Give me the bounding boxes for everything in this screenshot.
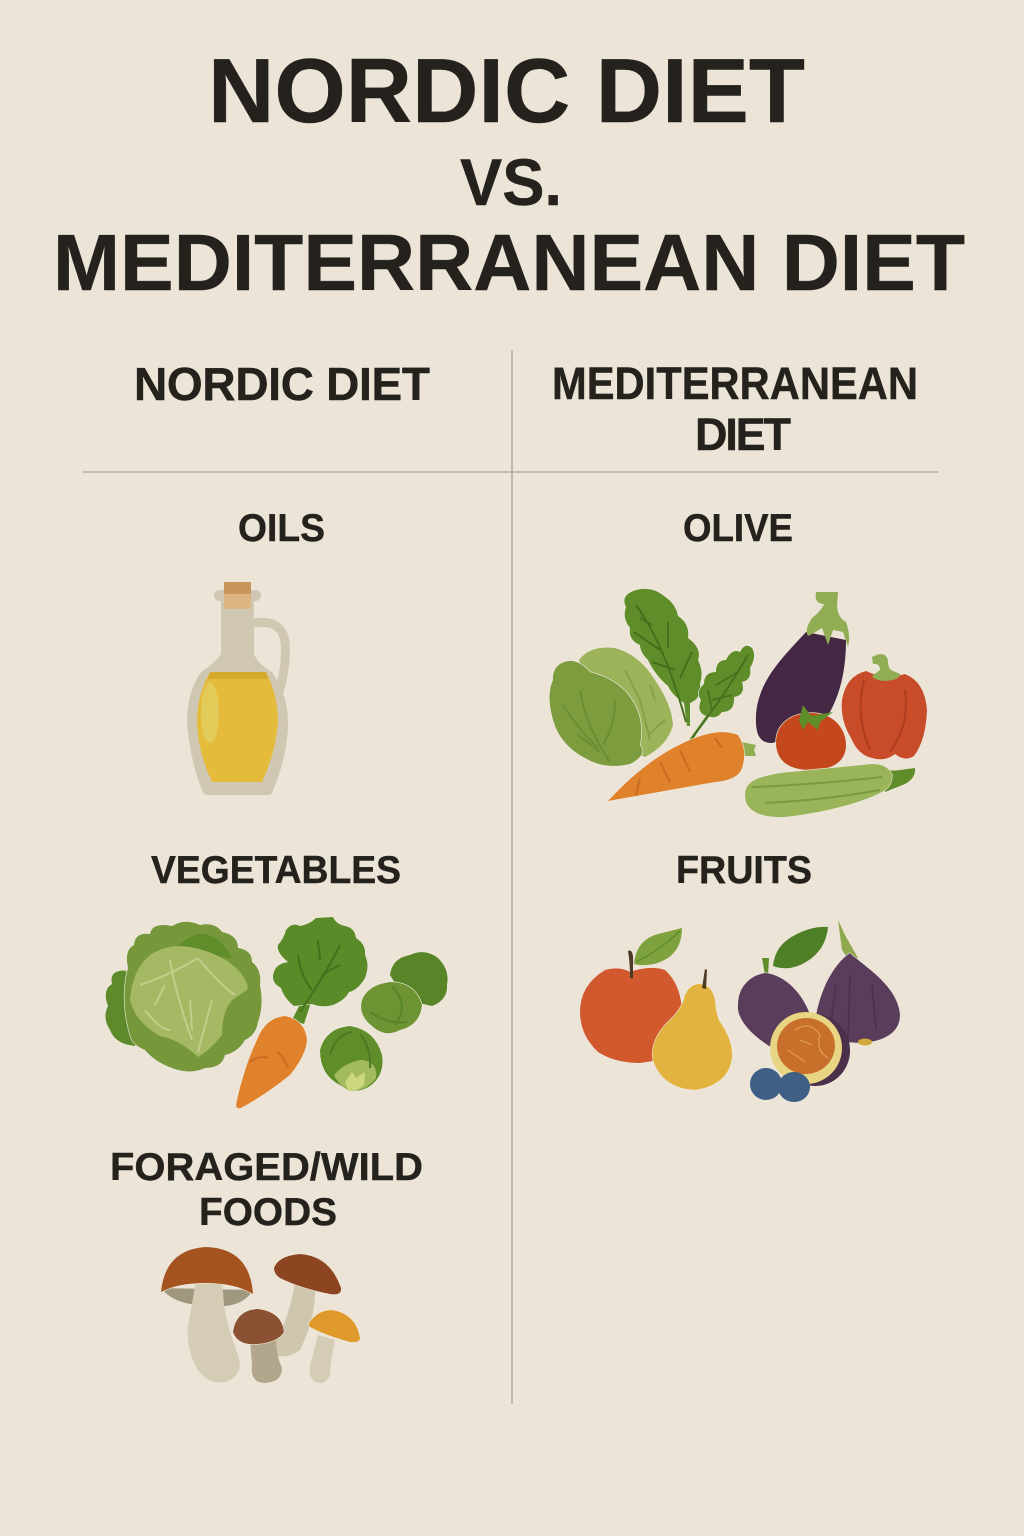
heading: Mediterranean Diet column: DIET [695, 409, 791, 460]
label: foraged and wild foods: FORAGED/WILD [110, 1146, 423, 1189]
title: VS. [460, 145, 562, 219]
small brown mushroom [233, 1309, 284, 1383]
label: vegetables: VEGETABLES [151, 849, 401, 892]
icon: olive oil bottle [187, 582, 288, 795]
orange mushroom [309, 1310, 360, 1383]
heading: Nordic Diet column: NORDIC DIET [134, 358, 430, 410]
heading: Mediterranean Diet column: MEDITERRANEAN [552, 358, 918, 409]
eggplant [756, 592, 849, 743]
large mushroom [161, 1247, 253, 1382]
icon: Mediterranean vegetables [550, 589, 927, 817]
title: NORDIC DIET [208, 41, 805, 142]
carrot [236, 1016, 307, 1108]
bell pepper [842, 654, 927, 759]
spinach leaf [624, 589, 702, 726]
icon: fruits [580, 920, 900, 1102]
label: oils: OILS [238, 507, 325, 550]
apple [580, 928, 682, 1063]
zucchini [745, 764, 915, 817]
fig leaf [773, 927, 828, 968]
title: MEDITERRANEAN DIET [53, 218, 965, 307]
arugula leaf [689, 646, 754, 741]
left fig [738, 958, 813, 1053]
blueberries [750, 1068, 810, 1102]
tomato [776, 705, 846, 770]
right tall mushroom [274, 1254, 341, 1356]
cut fig [763, 1005, 857, 1092]
right fig [815, 920, 900, 1046]
pear [653, 969, 732, 1090]
label: olive: OLIVE [683, 507, 793, 550]
title [53, 41, 965, 307]
cabbage [550, 648, 673, 766]
heading: Mediterranean Diet column [552, 358, 918, 460]
Brussels sprouts [320, 952, 448, 1091]
cabbage [105, 922, 262, 1072]
icon: Nordic vegetables [105, 917, 448, 1108]
label: foraged and wild foods [110, 1146, 423, 1234]
kale leaf [273, 917, 368, 1024]
carrot [608, 732, 756, 801]
label: fruits: FRUITS [676, 849, 812, 892]
icon: mushrooms [161, 1247, 360, 1383]
label: foraged and wild foods: FOODS [199, 1191, 337, 1234]
